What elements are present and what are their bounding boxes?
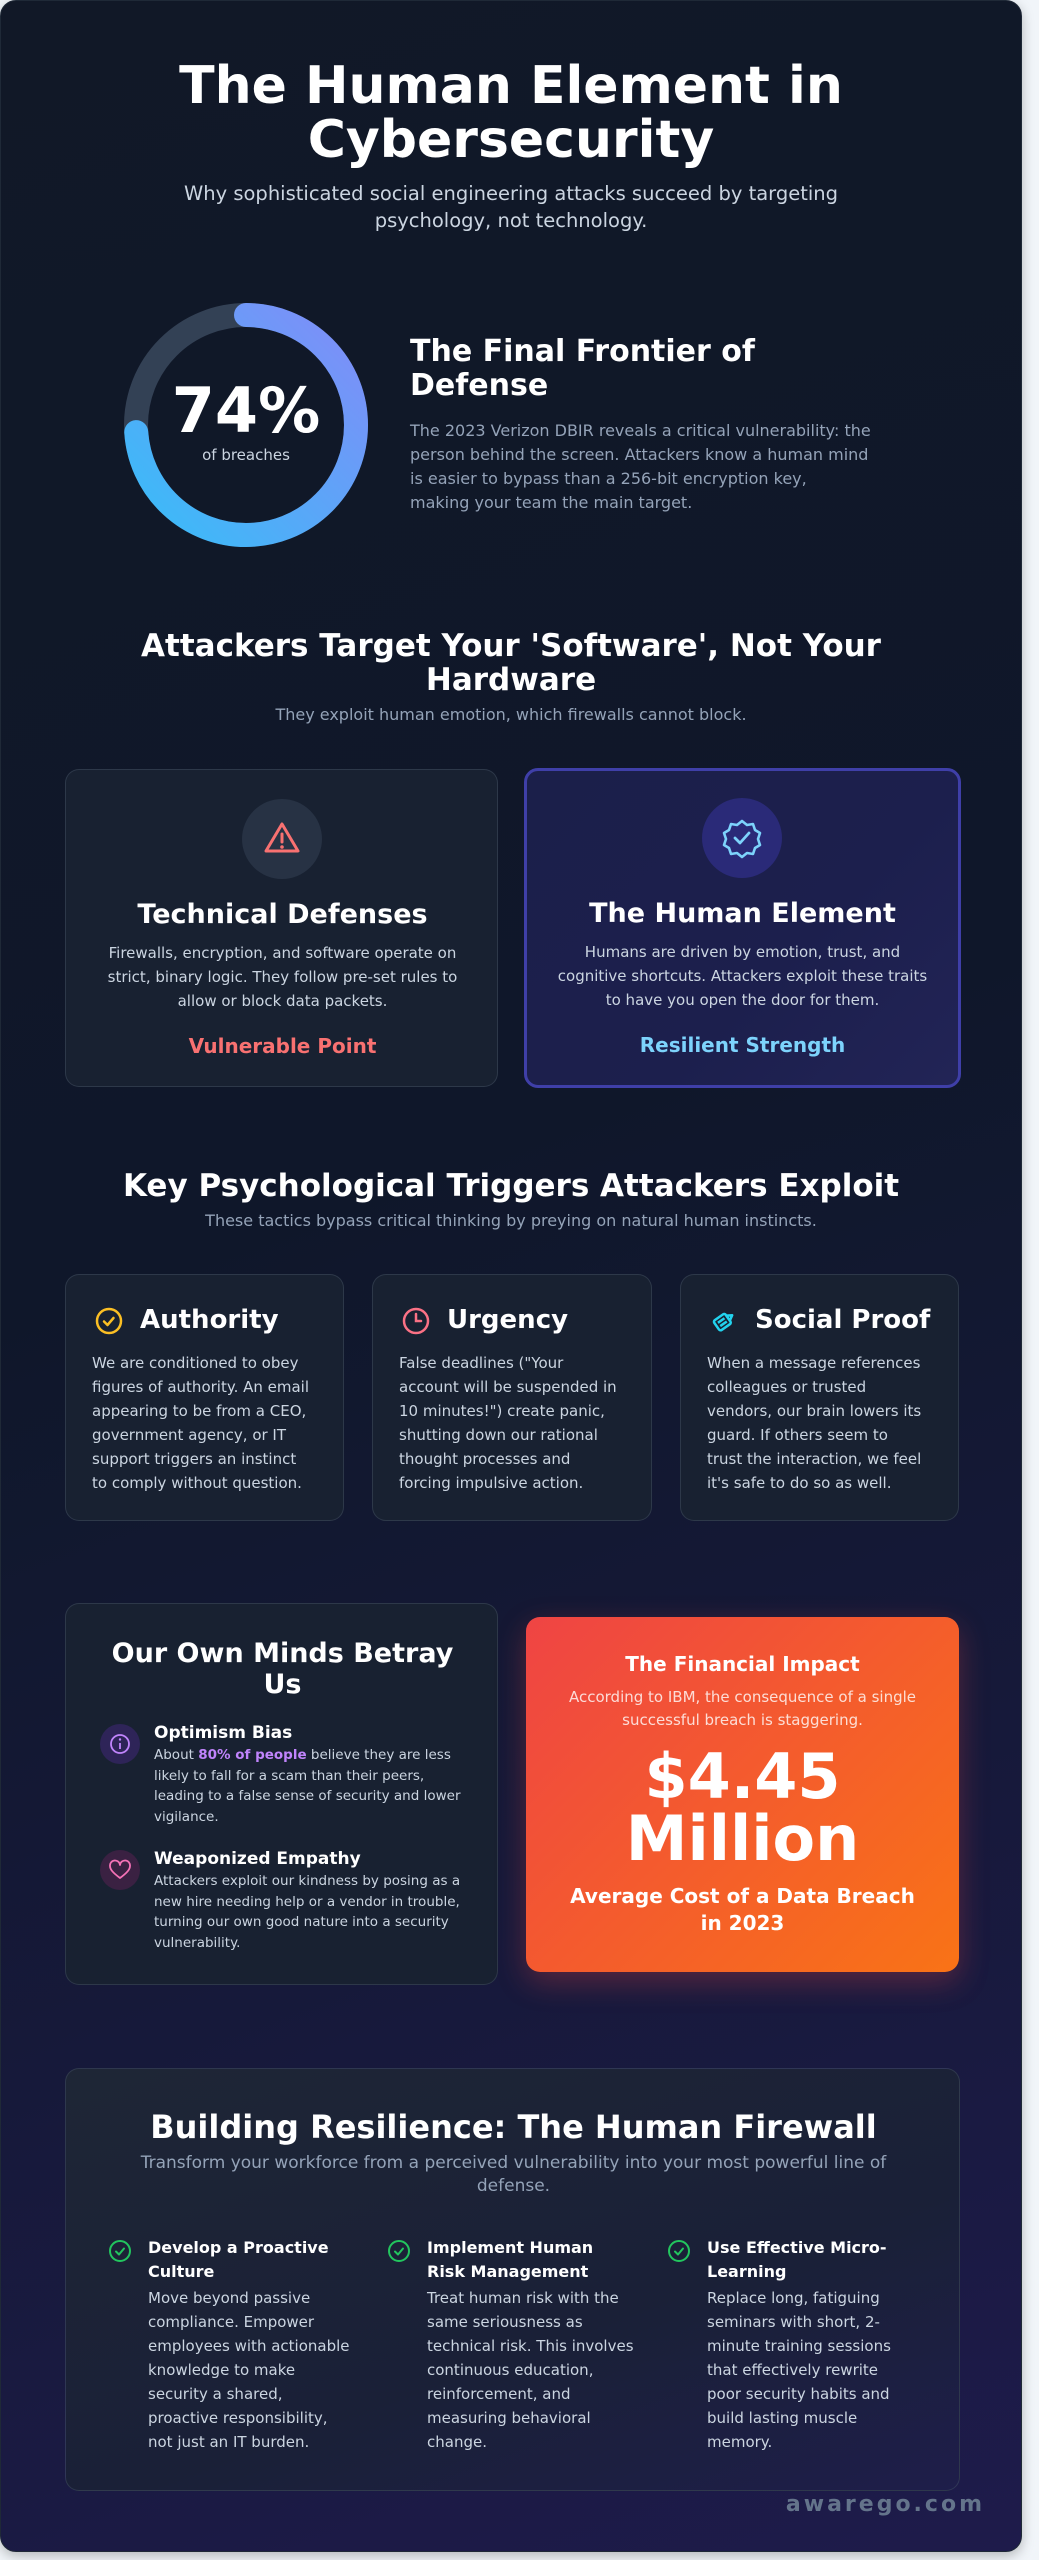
icon: warning (242, 799, 322, 879)
item text: About 80% of people believe they are less (154, 1747, 451, 1763)
item: optimism bias (100, 1723, 461, 1824)
trigger text: account will be suspended in (399, 1378, 617, 1396)
icon: check (109, 2240, 131, 2262)
panel: building resilience (65, 2068, 960, 2491)
trigger text (399, 1354, 617, 1492)
title (179, 56, 843, 170)
item text: change. (427, 2433, 487, 2451)
item text (154, 1873, 460, 1950)
panel: financial impact (526, 1617, 959, 1972)
trigger title: Urgency (447, 1305, 568, 1335)
card footer label: Vulnerable Point (189, 1034, 376, 1058)
panel heading: Building Resilience: The Human Firewall (150, 2108, 877, 2146)
item title: Weaponized Empathy (154, 1849, 361, 1869)
item text (426, 2289, 634, 2451)
donut chart: 74% (124, 303, 368, 547)
card title: The Human Element (589, 898, 896, 929)
trigger text: 10 minutes!") create panic, (399, 1402, 605, 1420)
item text: seminars with short, 2- (707, 2313, 880, 2331)
stat label: Average Cost of a Data Breach (570, 1884, 915, 1908)
big stat (626, 1740, 859, 1875)
item text: leading to a false sense of security and lower (154, 1788, 460, 1804)
trigger text (707, 1354, 921, 1492)
item title (427, 2238, 593, 2281)
big stat: $4.45 (644, 1740, 841, 1813)
item text: likely to fall for a scam than their peers, (154, 1768, 424, 1784)
item text: knowledge to make (148, 2361, 295, 2379)
frontier text block (410, 334, 871, 512)
frontier paragraph: person behind the screen. Attackers know a human mind (410, 445, 868, 464)
item text: build lasting muscle (707, 2409, 857, 2427)
panel title: The Financial Impact (625, 1652, 860, 1676)
item title: Use Effective Micro- (707, 2238, 887, 2257)
icon: social proof (712, 1312, 734, 1332)
item text: measuring behavioral (427, 2409, 591, 2427)
item text: not just an IT burden. (148, 2433, 309, 2451)
item title (148, 2238, 329, 2281)
section subtitle: They exploit human emotion, which firewalls cannot block. (275, 705, 747, 724)
item text: reinforcement, and (427, 2385, 570, 2403)
frontier heading: Defense (410, 368, 548, 403)
item text: continuous education, (427, 2361, 593, 2379)
stat label (570, 1884, 915, 1935)
panel description: According to IBM, the consequence of a single successful breach is staggering. (569, 1688, 916, 1729)
item text (154, 1747, 461, 1824)
item text: turning our own good nature into a security (154, 1914, 449, 1930)
trigger text: colleagues or trusted (707, 1378, 866, 1396)
trigger text: appearing to be from a CEO, (92, 1402, 306, 1420)
item text: poor security habits and (707, 2385, 890, 2403)
trigger title: Authority (140, 1305, 279, 1335)
trigger text: guard. If others seem to (707, 1426, 888, 1444)
trigger text: figures of authority. An email (92, 1378, 309, 1396)
item text: compliance. Empower (148, 2313, 314, 2331)
item text: same seriousness as (427, 2313, 583, 2331)
item text: employees with actionable (148, 2337, 350, 2355)
item title: Optimism Bias (154, 1723, 292, 1743)
trigger text: forcing impulsive action. (399, 1474, 583, 1492)
icon: check (388, 2240, 410, 2262)
item text: vulnerability. (154, 1934, 240, 1950)
panel: authority (65, 1274, 344, 1521)
trigger text: support triggers an instinct (92, 1450, 296, 1468)
item: weaponized empathy (100, 1849, 460, 1950)
trigger text: trust the interaction, we feel (707, 1450, 921, 1468)
item text: proactive responsibility, (148, 2409, 328, 2427)
footer brand: awarego.com (786, 2492, 985, 2517)
stat value: 74% (172, 374, 320, 447)
trigger text: thought processes and (399, 1450, 570, 1468)
icon: check (668, 2240, 690, 2262)
trigger text: When a message references (707, 1354, 920, 1372)
frontier heading (410, 334, 756, 403)
trigger text: shutting down our rational (399, 1426, 598, 1444)
item text: Move beyond passive (148, 2289, 310, 2307)
trigger text: to comply without question. (92, 1474, 302, 1492)
frontier paragraph (410, 421, 871, 512)
item text: Attackers exploit our kindness by posing as a (154, 1873, 460, 1889)
item text: minute training sessions (707, 2337, 891, 2355)
icon: check circle yellow (96, 1308, 122, 1334)
panel heading (112, 1638, 453, 1700)
panel: technical defenses (65, 769, 498, 1087)
item title: Risk Management (427, 2262, 588, 2281)
icon: clock (402, 1308, 430, 1334)
title: The Human Element in (179, 56, 843, 116)
item text: security a shared, (148, 2385, 282, 2403)
stat label: of breaches (202, 446, 290, 464)
section subtitle: These tactics bypass critical thinking by preying on natural human instincts. (205, 1211, 817, 1230)
title: Cybersecurity (308, 110, 714, 170)
frontier paragraph: making your team the main target. (410, 493, 692, 512)
stat label: in 2023 (701, 1911, 784, 1935)
panel: our own minds (65, 1603, 498, 1985)
trigger text: vendors, our brain lowers its (707, 1402, 921, 1420)
section heading: triggers: Key Psychological Triggers Attackers Exploit (123, 1168, 899, 1204)
frontier paragraph: The 2023 Verizon DBIR reveals a critical vulnerability: the (410, 421, 871, 440)
item text: memory. (707, 2433, 772, 2451)
item title: Implement Human (427, 2238, 593, 2257)
big stat: Million (626, 1802, 859, 1875)
icon: badge check (702, 798, 782, 878)
card footer label: Resilient Strength (640, 1033, 845, 1057)
item text: new hire needing help or a vendor in trouble, (154, 1894, 460, 1910)
section heading: attackers target: Attackers Target Your 'Software', Not Your Hardware (141, 628, 881, 698)
item text (707, 2289, 891, 2451)
card description: Humans are driven by emotion, trust, and cognitive shortcuts. Attackers exploit these traits to have you open the door for them. (558, 943, 927, 1009)
item text: vigilance. (154, 1808, 219, 1824)
item title: Learning (707, 2262, 786, 2281)
frontier paragraph: is easier to bypass than a 256-bit encryption key, (410, 469, 807, 488)
panel: human element (524, 768, 961, 1088)
panel: urgency (372, 1274, 652, 1521)
item: micro-learning (668, 2238, 891, 2451)
trigger text: it's safe to do so as well. (707, 1474, 891, 1492)
trigger text (92, 1354, 309, 1492)
icon: heart (100, 1850, 140, 1890)
item title: Develop a Proactive (148, 2238, 329, 2257)
card title: Technical Defenses (137, 899, 428, 930)
item title: Culture (148, 2262, 214, 2281)
item text: Treat human risk with the (427, 2289, 619, 2307)
subtitle: Why sophisticated social engineering attacks succeed by targeting psychology, not technology. (184, 182, 838, 232)
item text: Replace long, fatiguing (707, 2289, 880, 2307)
item text: technical risk. This involves (427, 2337, 634, 2355)
trigger text: government agency, or IT (92, 1426, 286, 1444)
item text: that effectively rewrite (707, 2361, 878, 2379)
frontier heading: The Final Frontier of (410, 334, 755, 369)
item: human risk management (388, 2238, 634, 2451)
item text (148, 2289, 350, 2451)
item title (707, 2238, 887, 2281)
item: proactive culture (109, 2238, 350, 2451)
trigger text: We are conditioned to obey (92, 1354, 298, 1372)
trigger title: Social Proof (755, 1305, 930, 1335)
panel subtitle: Transform your workforce from a perceived vulnerability into your most powerful line of defense. (141, 2153, 886, 2196)
card description: Firewalls, encryption, and software operate on strict, binary logic. They follow pre-set rules to allow or block data packets. (108, 944, 457, 1010)
panel heading: Our Own Minds Betray (112, 1638, 453, 1669)
panel heading: Us (264, 1669, 302, 1700)
trigger text: False deadlines ("Your (399, 1354, 563, 1372)
panel: social proof (680, 1274, 959, 1521)
icon: info (100, 1724, 140, 1764)
